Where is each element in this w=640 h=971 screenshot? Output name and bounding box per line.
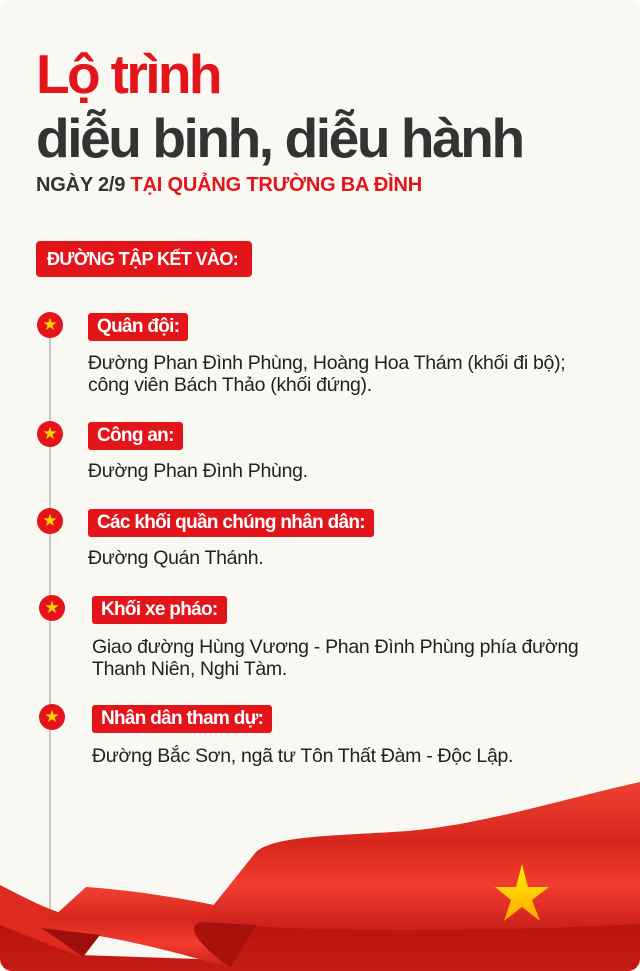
icon: star dot bbox=[37, 421, 63, 447]
text: công viên Bách Thảo (khối đứng). bbox=[88, 374, 372, 396]
icon: star dot: ★ bbox=[42, 424, 58, 443]
label: quần chúng: Các khối quần chúng nhân dân: bbox=[97, 512, 365, 533]
label: Công an bbox=[88, 422, 183, 450]
text: Đường Bắc Sơn, ngã tư Tôn Thất Đàm - Độc Lập. bbox=[92, 745, 513, 767]
label: nhân dân bbox=[92, 705, 272, 733]
label: xe pháo bbox=[92, 596, 227, 624]
text bbox=[88, 352, 565, 396]
text: Đường Phan Đình Phùng. bbox=[88, 460, 308, 482]
item 5 bbox=[39, 704, 513, 767]
text: Giao đường Hùng Vương - Phan Đình Phùng phía đường bbox=[92, 636, 578, 658]
timeline line bbox=[49, 325, 51, 945]
icon: star dot bbox=[37, 312, 63, 338]
item 4 bbox=[39, 595, 578, 680]
label: xe pháo: Khối xe pháo: bbox=[101, 599, 218, 620]
title: Lộ trình bbox=[36, 43, 220, 105]
text: Thanh Niên, Nghi Tàm. bbox=[92, 658, 287, 680]
subtitle heading: diễu binh, diễu hành bbox=[36, 107, 523, 169]
icon: star dot bbox=[39, 704, 65, 730]
flag star bbox=[495, 864, 549, 921]
text bbox=[92, 636, 578, 680]
bottom dark band bbox=[0, 915, 640, 971]
text: Đường Quán Thánh. bbox=[88, 547, 263, 569]
label: Quân đội bbox=[88, 313, 188, 341]
section badge bbox=[36, 241, 252, 277]
label: nhân dân: Nhân dân tham dự: bbox=[101, 708, 263, 729]
label: Quân đội: Quân đội: bbox=[97, 316, 179, 337]
section badge: ĐƯỜNG TẬP KẾT VÀO: bbox=[47, 249, 238, 269]
label: Công an: Công an: bbox=[97, 425, 174, 446]
icon: star dot bbox=[39, 595, 65, 621]
icon: star dot: ★ bbox=[44, 707, 60, 726]
icon: star dot bbox=[37, 508, 63, 534]
item 2 bbox=[37, 421, 308, 482]
main ribbon bbox=[200, 782, 640, 930]
date and place: NGÀY 2/9 TẠI QUẢNG TRƯỜNG BA ĐÌNH bbox=[36, 174, 422, 196]
item 1 bbox=[37, 312, 565, 396]
icon: star dot: ★ bbox=[44, 598, 60, 617]
text: Đường Phan Đình Phùng, Hoàng Hoa Thám (khối đi bộ); bbox=[88, 352, 565, 374]
flag ribbon bbox=[0, 782, 640, 971]
icon: star dot: ★ bbox=[42, 315, 58, 334]
icon: star dot: ★ bbox=[42, 511, 58, 530]
item 3 bbox=[37, 508, 374, 569]
left ribbon bbox=[0, 885, 82, 957]
